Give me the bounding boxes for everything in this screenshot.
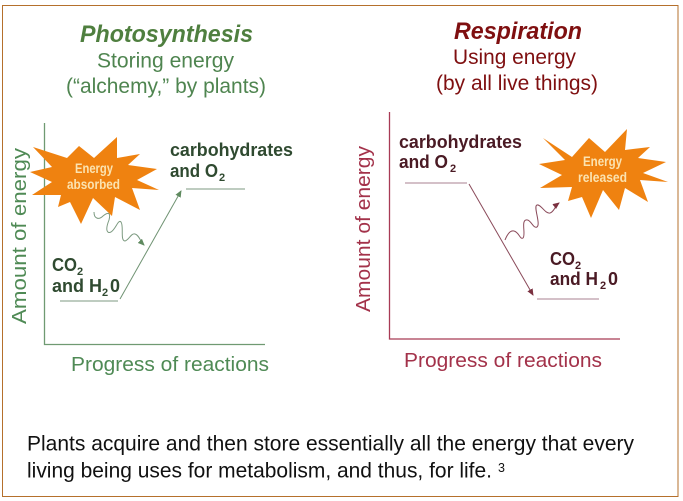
- label: carbohydrates and O2: 2: [219, 172, 225, 184]
- subtitle: storing energy: Storing energy: [97, 50, 234, 72]
- caption: living being uses for metabolism, and thus, for life.: [27, 460, 492, 482]
- label: carbohydrates and O2: carbohydrates: [399, 132, 522, 152]
- label: CO2 and H2O: [52, 255, 120, 299]
- label: carbohydrates and O2: and O: [399, 152, 448, 172]
- high energy level line: [405, 182, 467, 184]
- chart: photosynthesis energy diagram: [9, 123, 293, 376]
- label: CO2 and H2O: 0: [608, 269, 618, 289]
- title: Respiration: Respiration: [454, 18, 582, 45]
- reaction arrow: [120, 191, 181, 299]
- label: carbohydrates and O2: 2: [450, 163, 456, 175]
- wavy energy arrow: [505, 203, 559, 240]
- x axis label: Progress of reactions: [404, 350, 602, 372]
- icon: energy released starburst: [539, 129, 668, 218]
- icon: energy absorbed starburst: [30, 137, 159, 224]
- wavy energy arrow: [94, 212, 144, 245]
- low energy level line: [60, 300, 118, 302]
- subtitle: using energy: Using energy: [453, 46, 576, 69]
- high energy level line: [186, 188, 245, 190]
- star label: [578, 153, 627, 185]
- chart: respiration energy diagram: [353, 112, 668, 372]
- star label: [67, 160, 120, 192]
- axes: [44, 123, 265, 344]
- label: carbohydrates and O2: [399, 132, 522, 175]
- label: CO2 and H2O: 0: [110, 276, 120, 296]
- subtitle: by all live things: (by all live things): [436, 72, 598, 95]
- star label: Energy: [583, 153, 622, 169]
- star label: released: [578, 169, 627, 185]
- footnote marker: 3: [498, 461, 505, 475]
- label: carbohydrates and O2: and O: [170, 161, 218, 181]
- label: CO2 and H2O: CO: [550, 249, 575, 269]
- label: CO2 and H2O: CO: [52, 255, 77, 275]
- star label: absorbed: [67, 176, 120, 192]
- star label: Energy: [75, 160, 113, 176]
- panel: photosynthesis heading: [66, 21, 266, 98]
- y axis label: Amount of energy: [353, 146, 375, 312]
- label: CO2 and H2O: [550, 249, 618, 292]
- y axis label: Amount of energy: [9, 148, 31, 324]
- axes: [390, 112, 620, 339]
- label: CO2 and H2O: 2: [77, 266, 83, 278]
- label: CO2 and H2O: 2: [102, 287, 108, 299]
- label: CO2 and H2O: 2: [575, 260, 581, 272]
- title: Photosynthesis: Photosynthesis: [80, 21, 253, 48]
- reaction arrow: [469, 184, 533, 295]
- caption: Plants acquire and then store essentially all the energy that every: [27, 432, 634, 456]
- panel: respiration heading: [436, 18, 598, 95]
- label: carbohydrates and O2: carbohydrates: [170, 140, 293, 160]
- low energy level line: [537, 298, 599, 300]
- label: CO2 and H2O: and H: [52, 276, 102, 296]
- label: carbohydrates and O2: [170, 140, 293, 184]
- label: CO2 and H2O: 2: [600, 280, 606, 292]
- label: CO2 and H2O: and H: [550, 269, 598, 289]
- subtitle: alchemy: (“alchemy,” by plants): [66, 75, 266, 98]
- caption: [27, 432, 634, 482]
- x axis label: Progress of reactions: [71, 354, 269, 376]
